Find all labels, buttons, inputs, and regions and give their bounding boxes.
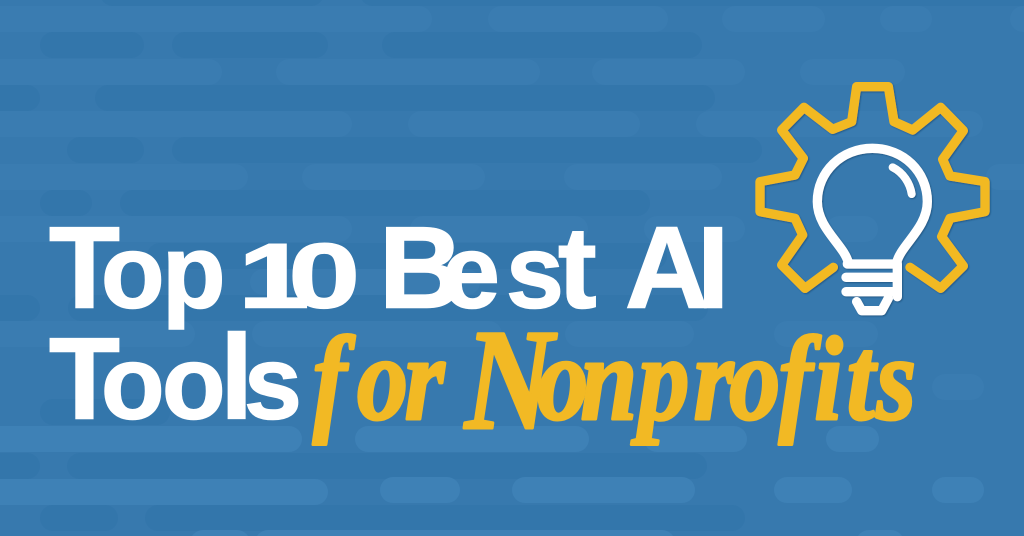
title: white heading: T xyxy=(49,314,120,444)
title: white heading: A xyxy=(625,202,709,332)
title: white heading: I xyxy=(697,202,729,332)
icon: gear outline xyxy=(760,87,985,288)
title: white heading: B xyxy=(379,202,463,332)
title: white heading: l xyxy=(220,310,253,444)
title: white heading: t xyxy=(558,202,597,332)
title: yellow script: onprofits xyxy=(537,313,916,446)
title: white heading: p xyxy=(162,214,226,330)
title: yellow script xyxy=(313,300,916,459)
title: yellow script: N xyxy=(463,300,557,459)
title: white heading: o xyxy=(162,326,226,442)
title: yellow script: for xyxy=(313,313,446,446)
title: white heading: s xyxy=(506,214,564,330)
title: white heading: o xyxy=(101,214,165,330)
title: white heading: o xyxy=(101,326,165,442)
title: white heading xyxy=(49,202,729,444)
title: white heading: e xyxy=(442,214,500,330)
title: white heading: T xyxy=(49,202,120,332)
title: white heading: s xyxy=(244,326,302,442)
title: white heading: 10 xyxy=(238,224,360,327)
icon: light bulb xyxy=(817,148,927,311)
icon: gear and light bulb xyxy=(760,87,985,311)
